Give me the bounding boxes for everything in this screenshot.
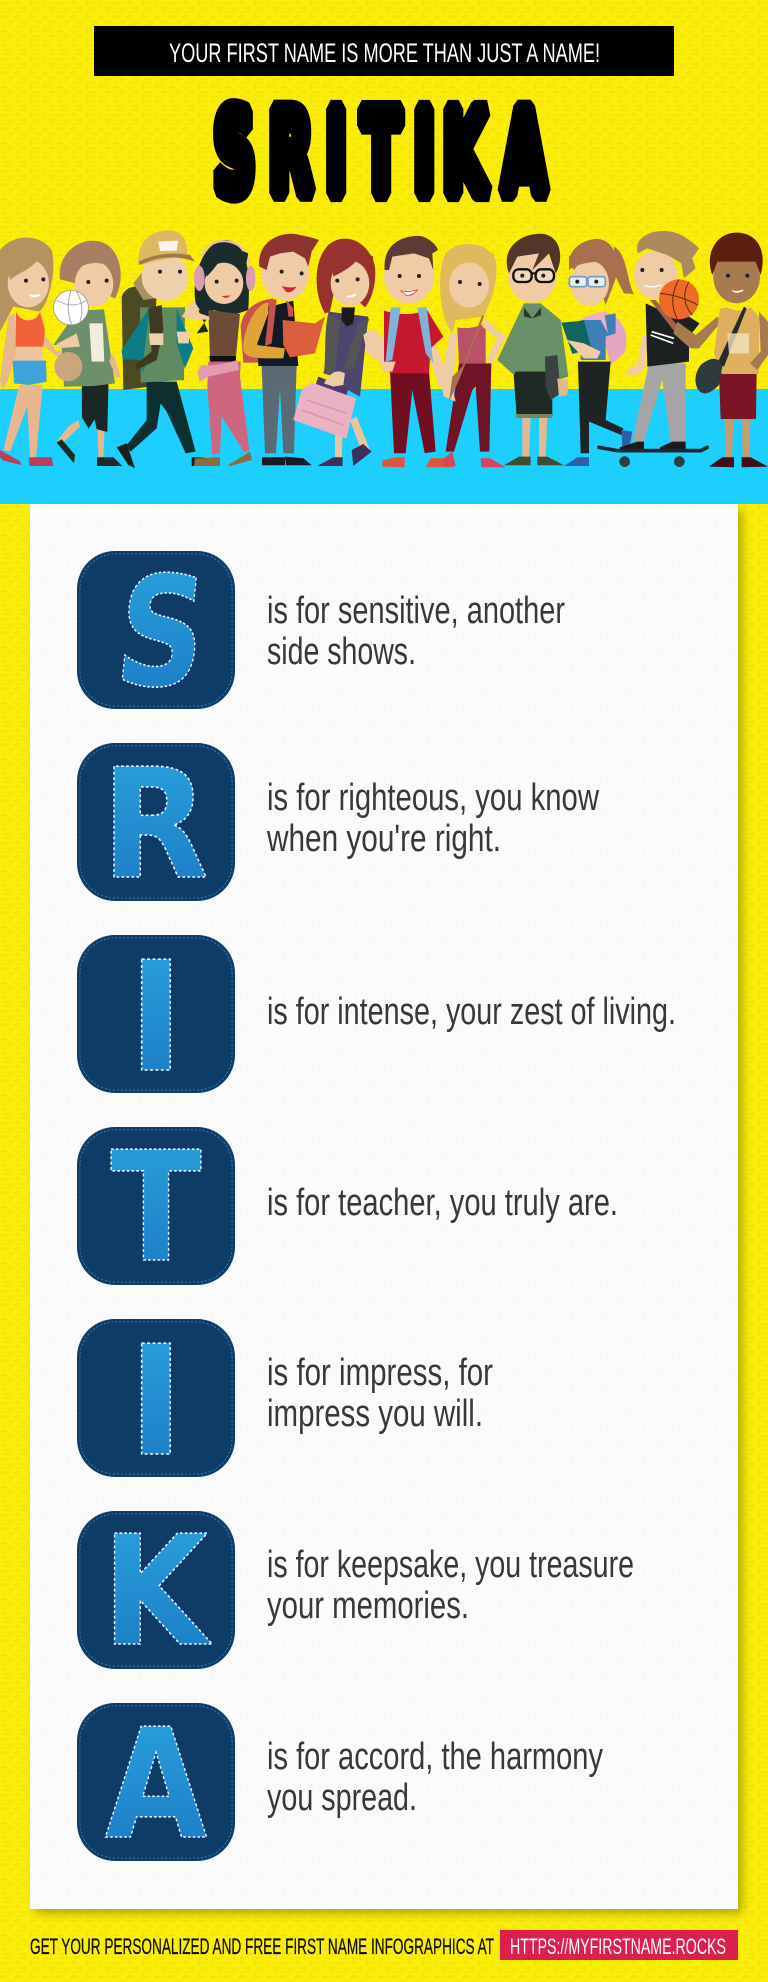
row K (77, 1504, 634, 1681)
text: S: is for sensitive, another (267, 590, 565, 632)
icon: letter T (77, 1119, 235, 1296)
text: R: when you're right. (266, 818, 501, 860)
text: A: is for accord, the harmony (267, 1736, 603, 1778)
icon: letter I: I (128, 929, 184, 1106)
person 6: girl with pink bag (293, 239, 384, 466)
person 4: girl with headphones (182, 240, 255, 466)
row I second (77, 1313, 493, 1490)
icon: letter A: A (105, 1696, 207, 1873)
row S (77, 544, 565, 721)
person 12: curly-haired boy with tank top (695, 233, 768, 467)
person 9: boy with glasses (497, 234, 568, 465)
icon: letter R: R (101, 736, 209, 913)
person 5: boy with red hair and book (241, 234, 325, 465)
icon: letter I (77, 1313, 235, 1490)
icon: letter T: T (110, 1119, 202, 1296)
left six people (0, 230, 384, 468)
row A (77, 1696, 603, 1873)
text: R: is for righteous, you know (267, 777, 599, 819)
icon: letter I: I (128, 1313, 184, 1490)
person 1: girl in orange top (0, 237, 80, 466)
text: K: is for keepsake, you treasure (267, 1544, 634, 1586)
top banner (94, 26, 674, 76)
person 7: boy in red shirt (382, 236, 454, 467)
right six people (382, 231, 768, 467)
sky-blue floor band (0, 389, 768, 504)
person 8: blonde girl (440, 244, 506, 467)
text: I second: impress you will. (267, 1393, 483, 1435)
icon: letter A (77, 1696, 235, 1873)
icon: letter S (77, 544, 235, 721)
footer call to action: GET YOUR PERSONALIZED AND FREE FIRST NAME INFOGRAPHICS AT (30, 1934, 494, 1959)
icon: letter K: K (102, 1504, 213, 1681)
text: K: your memories. (267, 1585, 469, 1627)
illustration: group of young people (0, 230, 768, 468)
text: S: side shows. (267, 631, 416, 673)
row R (77, 736, 599, 913)
text: I second: is for impress, for (267, 1352, 493, 1394)
person 11: boy on skateboard with basketball (599, 231, 721, 467)
row T (77, 1119, 618, 1296)
text: A: you spread. (267, 1777, 417, 1819)
person 3: boy with cap and backpack (117, 230, 220, 468)
icon: letter R (77, 736, 235, 913)
person 10: girl with ponytail and pink backpack (561, 239, 634, 466)
icon: letter I (77, 929, 235, 1106)
person 2: girl with volleyball (53, 241, 122, 466)
row I (77, 929, 676, 1106)
icon: letter K (77, 1504, 235, 1681)
title: name: SRITIKA (213, 88, 547, 221)
icon: letter S: S (108, 544, 215, 721)
text: T: is for teacher, you truly are. (267, 1182, 618, 1224)
white panel (30, 504, 742, 1913)
